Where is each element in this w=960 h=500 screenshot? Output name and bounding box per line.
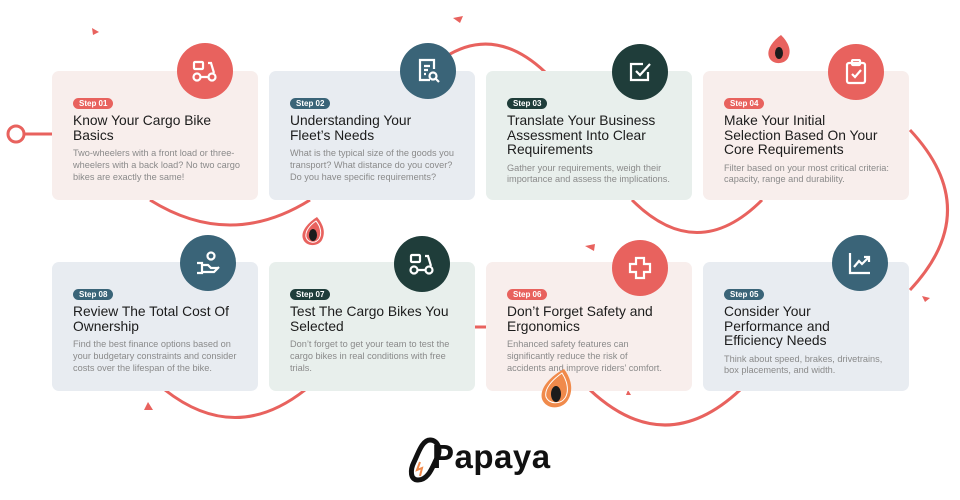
card: step 06: Step 06: [513, 290, 541, 299]
papaya icon top right: [768, 35, 790, 64]
icon: checkbox step 3: [612, 44, 668, 100]
card: step 06: Don’t Forget Safety and Ergonomics: [507, 304, 653, 334]
card: step 03: [486, 71, 692, 200]
card: step 01: Step 01: [79, 99, 107, 108]
card: step 07: [269, 262, 475, 391]
card: step 04: Selection Based On Your Core Requirements: [724, 128, 877, 157]
card: step 04: [703, 71, 909, 200]
papaya icon bottom: [542, 369, 572, 408]
card: step 02: [269, 71, 475, 200]
card: step 05: Think about speed, brakes, drivetrains, box placements, and width.: [724, 354, 882, 375]
card: step 04: Step 04: [730, 99, 758, 108]
card: step 06: [486, 262, 692, 391]
card: step 01: [52, 71, 258, 200]
card: step 02: What is the typical size of the goods you transport? What distance do you cover? Do you have specific requirements?: [290, 148, 454, 182]
card: step 07: Step 07: [296, 290, 324, 299]
logo: Papaya: [408, 438, 551, 482]
card: step 08: Step 08: [79, 290, 107, 299]
icon: chart step 5: [832, 235, 888, 291]
card: step 01: Know Your Cargo Bike Basics: [73, 113, 211, 143]
icon: clipboard step 4: [828, 44, 884, 100]
card: step 08: Find the best finance options based on your budgetary constraints and consider costs over the lifespan of the bike.: [73, 339, 236, 373]
icon: hand coin step 8: [180, 235, 236, 291]
card: step 05: Consider Your Performance and Efficiency Needs: [724, 304, 830, 348]
icon: cross step 6: [612, 240, 668, 296]
card: step 07: Don’t forget to get your team to test the cargo bikes in real conditions with free trials.: [290, 339, 449, 373]
papaya icon middle: [302, 217, 324, 246]
card: step 05: [703, 262, 909, 391]
card: step 05: Step 05: [730, 290, 758, 299]
card: step 03: Translate Your Business Assessment Into Clear Requirements: [507, 113, 655, 157]
card: step 07: Test The Cargo Bikes You Selected: [290, 304, 449, 334]
card: step 02: Step 02: [296, 99, 324, 108]
card: step 02: Understanding Your Fleet’s Needs: [290, 113, 411, 143]
card: step 01: Two-wheelers with a front load or three-wheelers with a back load? No two cargo bikes are exactly the same!: [73, 148, 240, 182]
icon: bike step 1: [177, 43, 233, 99]
card: step 04: Filter based on your most critical criteria: capacity, range and durability.: [724, 163, 889, 184]
card: step 04: Make Your Initial: [724, 113, 825, 128]
logo: Papaya: Papaya: [432, 438, 551, 475]
icon: document search step 2: [400, 43, 456, 99]
card: step 08: Review The Total Cost Of Ownership: [73, 304, 229, 334]
card: step 08: [52, 262, 258, 391]
card: step 06: Enhanced safety features can significantly reduce the risk of accidents and improve riders’ comfort.: [507, 339, 662, 373]
card: step 03: Gather your requirements, weigh their importance and assess the implications.: [507, 163, 670, 184]
icon: bike step 7: [394, 236, 450, 292]
card: step 03: Step 03: [513, 99, 541, 108]
